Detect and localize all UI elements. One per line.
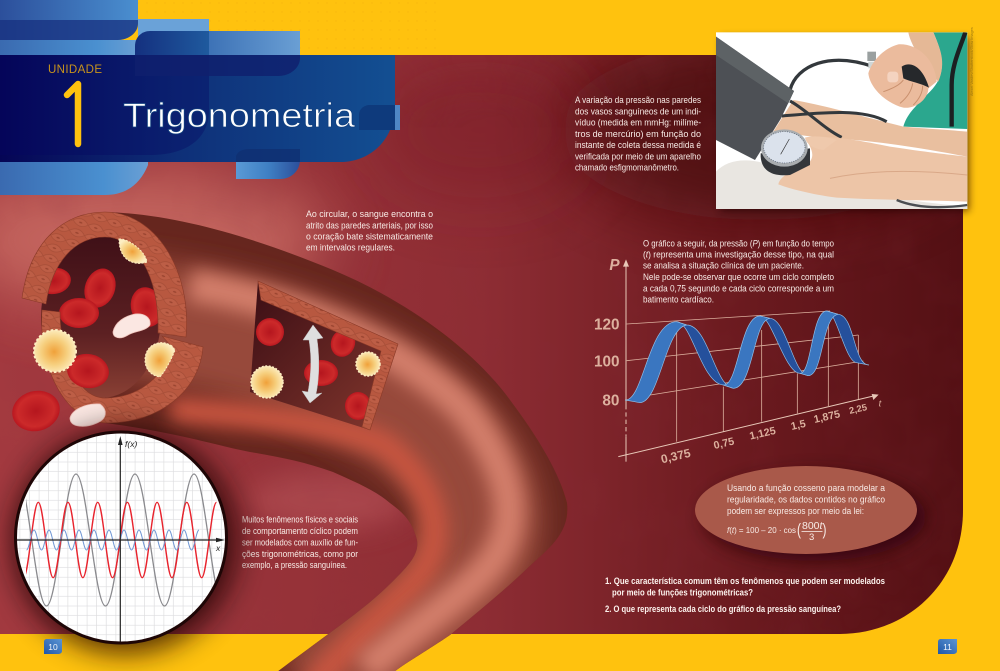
text: cyclic phenomena: Muitos fenômenos físicos e sociais xyxy=(242,514,359,524)
vessel wall upper arc xyxy=(22,212,187,337)
stethoscope strap xyxy=(952,32,965,127)
platelet, centre xyxy=(113,314,150,338)
photo: sphygmomanometer xyxy=(716,32,967,209)
text: pressure variation: chamado esfigmomanômetro. xyxy=(575,162,679,172)
text: graph intro: batimento cardíaco. xyxy=(643,294,714,304)
formula: ) xyxy=(822,521,826,540)
red cells in window xyxy=(256,318,371,420)
table xyxy=(716,160,967,209)
small right tab xyxy=(359,105,395,130)
text: pressure variation xyxy=(575,95,702,172)
small lower tab xyxy=(236,160,300,179)
tick labels: 0,375 xyxy=(660,446,692,466)
ribbon curve xyxy=(625,311,869,403)
platelet, lower xyxy=(70,404,105,426)
axes xyxy=(16,440,222,642)
callout: cosine law xyxy=(695,466,926,561)
red curve xyxy=(23,502,217,578)
finger creases xyxy=(883,80,923,105)
page number 11: 11 xyxy=(943,642,952,652)
thumb over gauge xyxy=(805,136,820,144)
formula: 3 xyxy=(809,532,814,543)
page number 10 xyxy=(44,639,62,654)
valve xyxy=(868,62,874,68)
lower hands xyxy=(778,137,967,202)
title: Trigonometria xyxy=(123,97,356,135)
window wall xyxy=(258,281,398,430)
chart: blood pressure over time: 100 xyxy=(594,354,620,371)
questions: 2. O que representa cada ciclo do gráfico da pressão sanguínea? xyxy=(605,604,841,614)
lower hose xyxy=(897,200,967,207)
hand holding bulb xyxy=(868,44,937,108)
curves xyxy=(17,474,224,606)
header band xyxy=(0,0,400,195)
light blue bar xyxy=(0,40,138,55)
main title block xyxy=(0,55,395,162)
text: pressure variation: instante de coleta dessa medida é xyxy=(575,140,701,150)
text: cyclic phenomena: ções trigonométricas, como por xyxy=(242,549,358,559)
formula: f(t) = 100 – 20 · cos xyxy=(727,525,796,535)
callout: cosine law: podem ser expressos por meio da lei: xyxy=(727,506,864,516)
gauge dial xyxy=(761,129,808,167)
questions xyxy=(605,576,885,614)
text: pressure variation: A variação da pressão nas paredes xyxy=(575,95,702,105)
blue curve xyxy=(26,530,199,550)
white cell, top xyxy=(119,239,147,263)
axis labels: P xyxy=(609,257,620,274)
lower blue bar xyxy=(0,162,148,195)
red cell, lower xyxy=(64,351,112,391)
tubes xyxy=(790,60,873,90)
text: cyclic phenomena: ser modelados com auxílio de fun- xyxy=(242,538,358,548)
page number 11 xyxy=(938,639,957,654)
chart: magnified sine waves: x xyxy=(215,543,221,553)
tick labels xyxy=(660,402,868,466)
text: graph intro: (t) representa uma investigação desse tipo, na qual xyxy=(643,250,834,260)
text: cyclic phenomena: de comportamento cíclico podem xyxy=(242,526,358,536)
text: graph intro: O gráfico a seguir, da pressão (P) em função do tempo xyxy=(643,238,834,248)
dark stripe xyxy=(0,20,138,40)
icon: pressure arrow xyxy=(302,325,323,403)
red cells inside ring xyxy=(35,264,168,330)
chart: blood pressure over time: 120 xyxy=(594,317,620,334)
arm xyxy=(773,100,967,157)
text: pressure variation: víduo (medida em mmHg: milíme- xyxy=(575,118,701,128)
scrubs xyxy=(903,32,967,129)
upper forearm xyxy=(908,32,942,82)
cuff xyxy=(716,37,794,160)
photo shadow xyxy=(721,37,969,211)
numeral 1 xyxy=(67,84,78,144)
bulb connector xyxy=(877,64,890,80)
text: circulation: o coração bate sistematicamente xyxy=(306,232,433,242)
text: graph intro xyxy=(643,238,834,304)
tick labels: 1,5 xyxy=(790,418,807,433)
text: pressure variation: dos vasos sanguíneos de um indi- xyxy=(575,106,701,116)
formula xyxy=(727,520,826,543)
gauge body xyxy=(761,148,810,175)
t axis xyxy=(618,396,875,457)
magnifier shadow xyxy=(12,428,238,654)
text: circulation: em intervalos regulares. xyxy=(306,242,395,252)
vessel cross-section ring xyxy=(8,212,203,437)
text: cyclic phenomena xyxy=(242,514,359,570)
text: pressure variation: verificada por meio de um aparelho xyxy=(575,152,701,162)
blood vessel tube xyxy=(100,212,567,671)
formula: 800t xyxy=(802,520,824,532)
P axis xyxy=(624,265,627,405)
tick labels: 2,25 xyxy=(848,402,868,416)
free red cell xyxy=(8,385,64,437)
text: graph intro: a cada 0,75 segundo e cada ciclo corresponde a um xyxy=(643,284,834,294)
tick labels: 1,875 xyxy=(813,408,841,426)
text: cyclic phenomena: exemplo, a pressão sanguínea. xyxy=(242,560,347,570)
callout: cosine law: regularidade, os dados contidos no gráfico xyxy=(727,494,885,504)
text: circulation xyxy=(306,209,433,252)
bulb xyxy=(902,64,929,88)
text: circulation: atrito das paredes arteriais, por isso xyxy=(306,220,433,230)
callout: cosine law: Usando a função cosseno para modelar a xyxy=(727,483,885,493)
vessel window cut-out xyxy=(250,281,398,430)
page number 10: 10 xyxy=(48,642,58,652)
grid lines xyxy=(627,311,863,442)
white cell, right xyxy=(145,343,175,377)
chart: blood pressure over time: t xyxy=(879,399,882,409)
text: graph intro: Nele pode-se observar que ocorre um ciclo completo xyxy=(643,272,834,282)
overlapping tab xyxy=(135,31,209,55)
top blue bar xyxy=(0,0,138,40)
chart: blood pressure over time: 80 xyxy=(602,393,619,410)
axis labels: f(x) xyxy=(125,439,137,449)
label: UNIDADE: UNIDADE xyxy=(48,64,102,76)
formula: ( xyxy=(797,521,801,540)
gray curve xyxy=(17,474,224,606)
text: circulation: Ao circular, o sangue encontra o xyxy=(306,209,433,219)
questions: por meio de funções trigonométricas? xyxy=(612,588,753,598)
large white cell xyxy=(34,330,76,372)
questions: 1. Que característica comum têm os fenômenos que podem ser modelados xyxy=(605,576,885,586)
fingernail xyxy=(887,72,898,82)
chart: magnified sine waves xyxy=(10,425,232,650)
tick labels: 1,125 xyxy=(748,425,777,443)
chart: blood pressure over time xyxy=(594,257,882,466)
tick labels: 0,75 xyxy=(713,436,736,452)
text: graph intro: se analisa a situação clínica de um paciente. xyxy=(643,260,804,270)
photo credit: Alexei Vasilev/Shutterstock/Glow Images xyxy=(970,27,974,96)
vessel wall lower arc xyxy=(42,310,203,423)
text: pressure variation: tros de mercúrio) em função do xyxy=(575,129,701,139)
white cells in window xyxy=(251,366,283,398)
